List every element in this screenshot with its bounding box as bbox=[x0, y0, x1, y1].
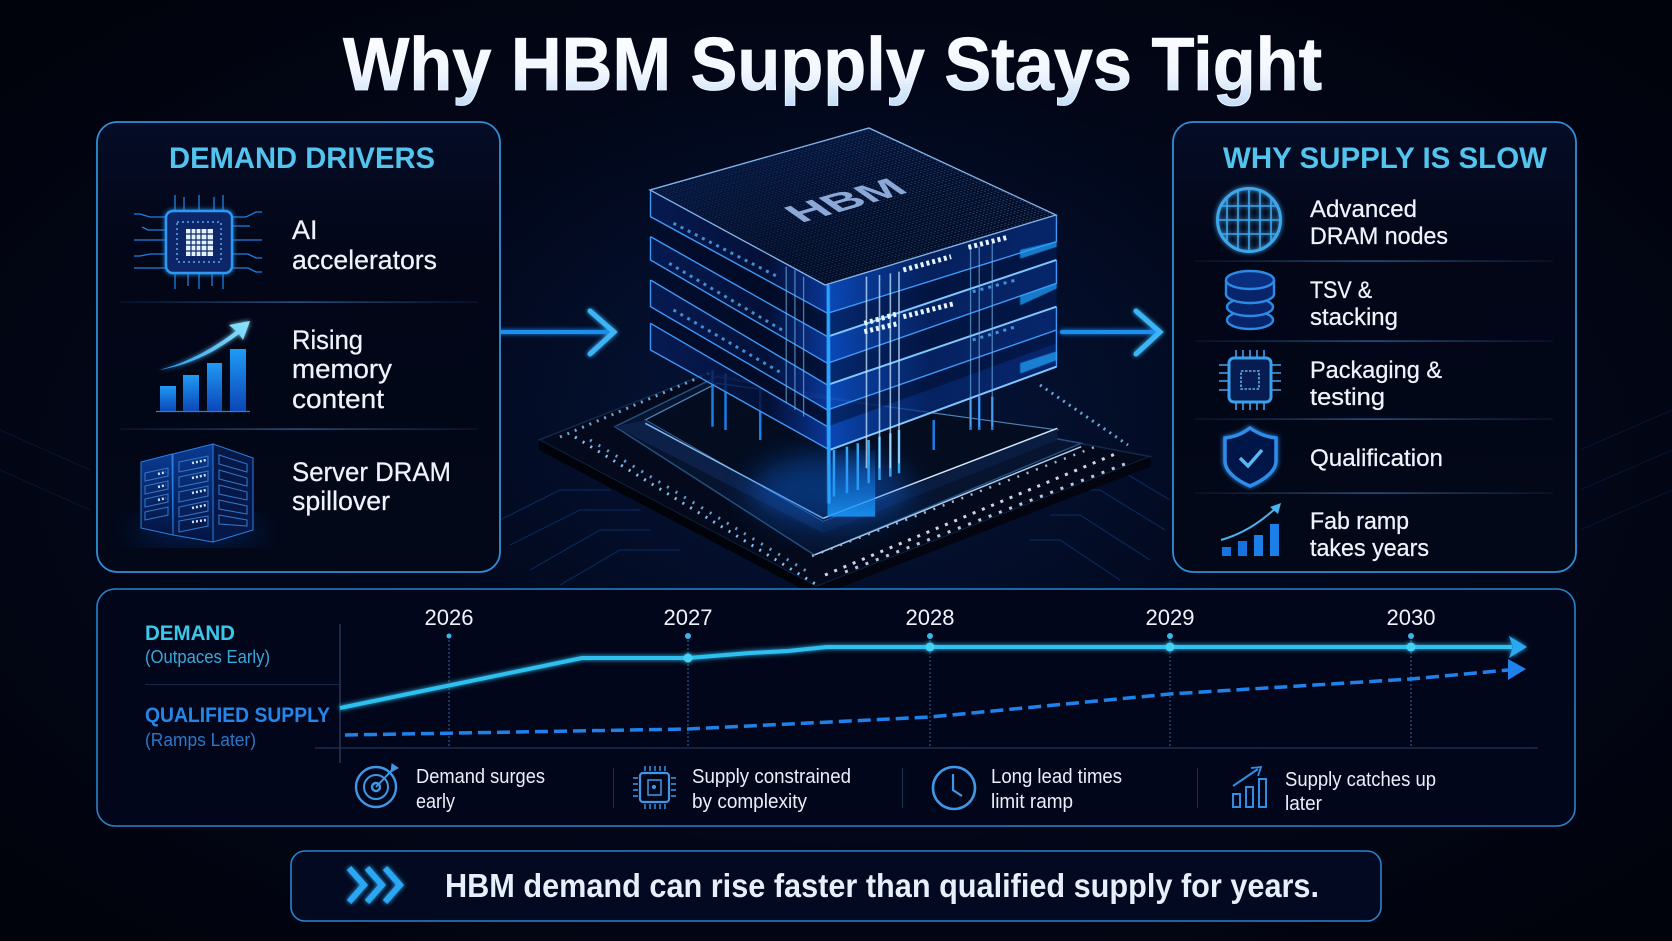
text: rising memory content: content bbox=[292, 384, 385, 414]
line chart: demand vs qualified supply bbox=[315, 605, 1538, 763]
icon: wafer bbox=[1218, 188, 1280, 252]
heading: demand drivers: DEMAND DRIVERS bbox=[169, 142, 435, 175]
text: supply catches up later bbox=[1285, 769, 1436, 815]
text: server DRAM spillover: spillover bbox=[292, 486, 390, 516]
text: packaging and testing bbox=[1310, 357, 1442, 411]
icon: rising bar chart bbox=[156, 321, 250, 412]
icon: triple chevron bbox=[349, 868, 400, 902]
text: demand surges early: Demand surges bbox=[416, 766, 545, 788]
legend: qualified supply: QUALIFIED SUPPLY bbox=[145, 704, 330, 727]
year labels: 2029 bbox=[1146, 605, 1194, 630]
icon: target bbox=[356, 764, 398, 807]
icon: AI accelerator chip bbox=[134, 195, 262, 289]
panel: demand drivers bbox=[97, 122, 500, 572]
legend: qualified supply bbox=[145, 704, 330, 750]
text: supply catches up later: later bbox=[1285, 793, 1322, 815]
arrow: demand to HBM bbox=[500, 311, 614, 354]
text: long lead times limit ramp: Long lead times bbox=[991, 766, 1122, 788]
title: Why HBM Supply Stays Tight bbox=[343, 22, 1322, 106]
text: advanced DRAM nodes: DRAM nodes bbox=[1310, 223, 1448, 250]
year labels: 2027 bbox=[664, 605, 712, 630]
text: AI accelerators: AI bbox=[292, 215, 318, 245]
year labels: 2026 bbox=[425, 605, 473, 630]
icon: shield check bbox=[1225, 428, 1276, 486]
callout: key takeaway bbox=[291, 851, 1381, 921]
text: qualification: Qualification bbox=[1310, 445, 1443, 472]
text: long lead times limit ramp: limit ramp bbox=[991, 791, 1073, 813]
top die face with HBM mark bbox=[650, 128, 1056, 285]
icon: server rack bbox=[132, 444, 262, 542]
text: supply constrained by complexity: by complexity bbox=[692, 791, 807, 813]
icon: catching up chart bbox=[1233, 767, 1266, 807]
text: advanced DRAM nodes bbox=[1310, 196, 1448, 250]
text: fab ramp takes years: takes years bbox=[1310, 535, 1429, 562]
legend: demand: (Outpaces Early) bbox=[145, 647, 270, 667]
icon: packaging chip bbox=[1219, 350, 1281, 410]
text: fab ramp takes years bbox=[1310, 508, 1429, 562]
central HBM chip illustration bbox=[539, 128, 1151, 597]
year labels bbox=[425, 605, 1435, 630]
text: advanced DRAM nodes: Advanced bbox=[1310, 196, 1417, 223]
top die face with HBM mark: HBM bbox=[775, 174, 917, 228]
panel: why supply is slow bbox=[1173, 122, 1576, 572]
text: packaging and testing: Packaging & bbox=[1310, 357, 1442, 384]
text: rising memory content bbox=[292, 325, 393, 414]
text: supply constrained by complexity: Supply constrained bbox=[692, 766, 851, 788]
memory die stack bbox=[650, 190, 1056, 503]
text: long lead times limit ramp bbox=[991, 766, 1122, 813]
heading: why supply is slow: WHY SUPPLY IS SLOW bbox=[1223, 142, 1548, 175]
text: supply catches up later: Supply catches up bbox=[1285, 769, 1436, 791]
icon: TSV stack bbox=[1226, 271, 1274, 329]
text: takeaway sentence: HBM demand can rise faster than qualified supply for years. bbox=[445, 867, 1319, 904]
legend: demand bbox=[145, 622, 270, 667]
text: server DRAM spillover: Server DRAM bbox=[292, 457, 451, 487]
icon: clock bbox=[933, 767, 975, 809]
text: fab ramp takes years: Fab ramp bbox=[1310, 508, 1409, 535]
text: demand surges early bbox=[416, 766, 545, 813]
icon: fab ramp chart bbox=[1221, 503, 1281, 556]
arrow: HBM to supply bbox=[1062, 311, 1160, 354]
legend: demand: DEMAND bbox=[145, 622, 235, 645]
year labels: 2028 bbox=[906, 605, 954, 630]
panel: timeline bbox=[97, 589, 1575, 826]
qualified supply line bbox=[345, 659, 1526, 735]
demand line bbox=[340, 636, 1527, 708]
glow beneath the stack bbox=[750, 455, 910, 525]
text: packaging and testing: testing bbox=[1310, 384, 1385, 411]
text: AI accelerators bbox=[292, 215, 437, 275]
text: server DRAM spillover bbox=[292, 457, 451, 516]
icon: constrained chip bbox=[633, 766, 676, 809]
text: rising memory content: memory bbox=[292, 354, 393, 384]
text: AI accelerators: accelerators bbox=[292, 245, 437, 275]
text: rising memory content: Rising bbox=[292, 325, 363, 355]
text: supply constrained by complexity bbox=[692, 766, 851, 813]
text: TSV and stacking: TSV & bbox=[1310, 277, 1372, 304]
text: TSV and stacking bbox=[1310, 277, 1398, 331]
text: TSV and stacking: stacking bbox=[1310, 304, 1398, 331]
year labels: 2030 bbox=[1387, 605, 1435, 630]
legend: qualified supply: (Ramps Later) bbox=[145, 730, 256, 750]
text: demand surges early: early bbox=[416, 791, 455, 813]
solder pad dots bbox=[560, 372, 1130, 585]
through-silicon pillars bbox=[713, 370, 992, 517]
chip package base bbox=[539, 373, 1151, 597]
